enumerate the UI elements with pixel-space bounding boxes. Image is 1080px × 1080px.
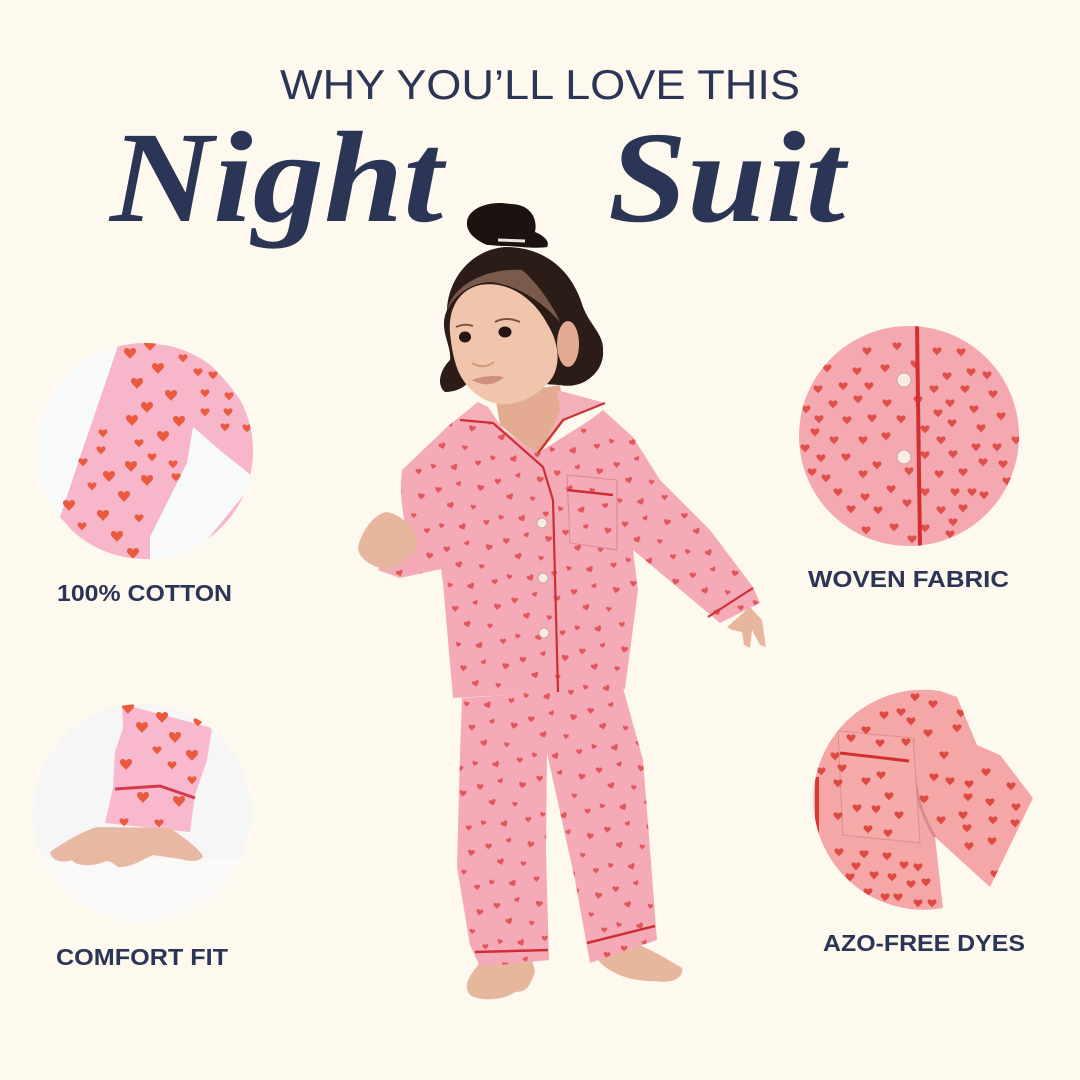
neck [495,385,565,456]
button upper [897,373,911,387]
hand [50,827,203,867]
cuff piping [115,786,195,798]
face [450,284,558,404]
hair tie [498,240,525,241]
pocket piping [567,490,613,495]
left fist [358,512,418,570]
label: 100% cotton: 100% COTTON [57,580,232,606]
trouser cuff piping [475,926,655,952]
eyes [459,326,512,342]
panel: 100% cotton circle [37,340,256,562]
mouth [472,376,504,384]
label: woven fabric: WOVEN FABRIC [808,566,1009,592]
feet [467,945,682,999]
shirt buttons [537,518,549,638]
right hand [727,607,766,648]
pocket [838,731,920,843]
hair bun [467,203,548,248]
cuff sleeve [105,704,212,832]
infographic canvas [33,70,1033,1000]
shirt sleeve cuff piping [708,588,753,617]
ear [557,321,579,367]
label: azo-free dyes: AZO-FREE DYES [823,930,1025,956]
pyjama trousers [457,688,657,967]
shirt [378,402,760,698]
panel: comfort fit circle [30,703,255,928]
collar and placket piping [460,403,605,692]
hair back [440,247,603,392]
panel: woven fabric circle [799,326,1019,546]
title: Night: Night [108,106,447,250]
placket piping [917,326,920,546]
button lower [897,450,911,464]
pocket [567,475,617,550]
pocket piping [840,753,909,761]
nose [472,362,494,366]
panel: azo-free dyes circle [810,685,1040,915]
collar flaps [460,390,605,442]
eyebrows [456,319,520,327]
heading line: WHY YOU’LL LOVE THIS [280,61,800,108]
child in pyjamas [358,203,766,999]
hairline wisps [447,270,560,322]
fold shadow [913,738,935,837]
title: Suit: Suit [608,106,849,250]
left edge piping [815,777,819,837]
label: comfort fit: COMFORT FIT [56,944,228,970]
